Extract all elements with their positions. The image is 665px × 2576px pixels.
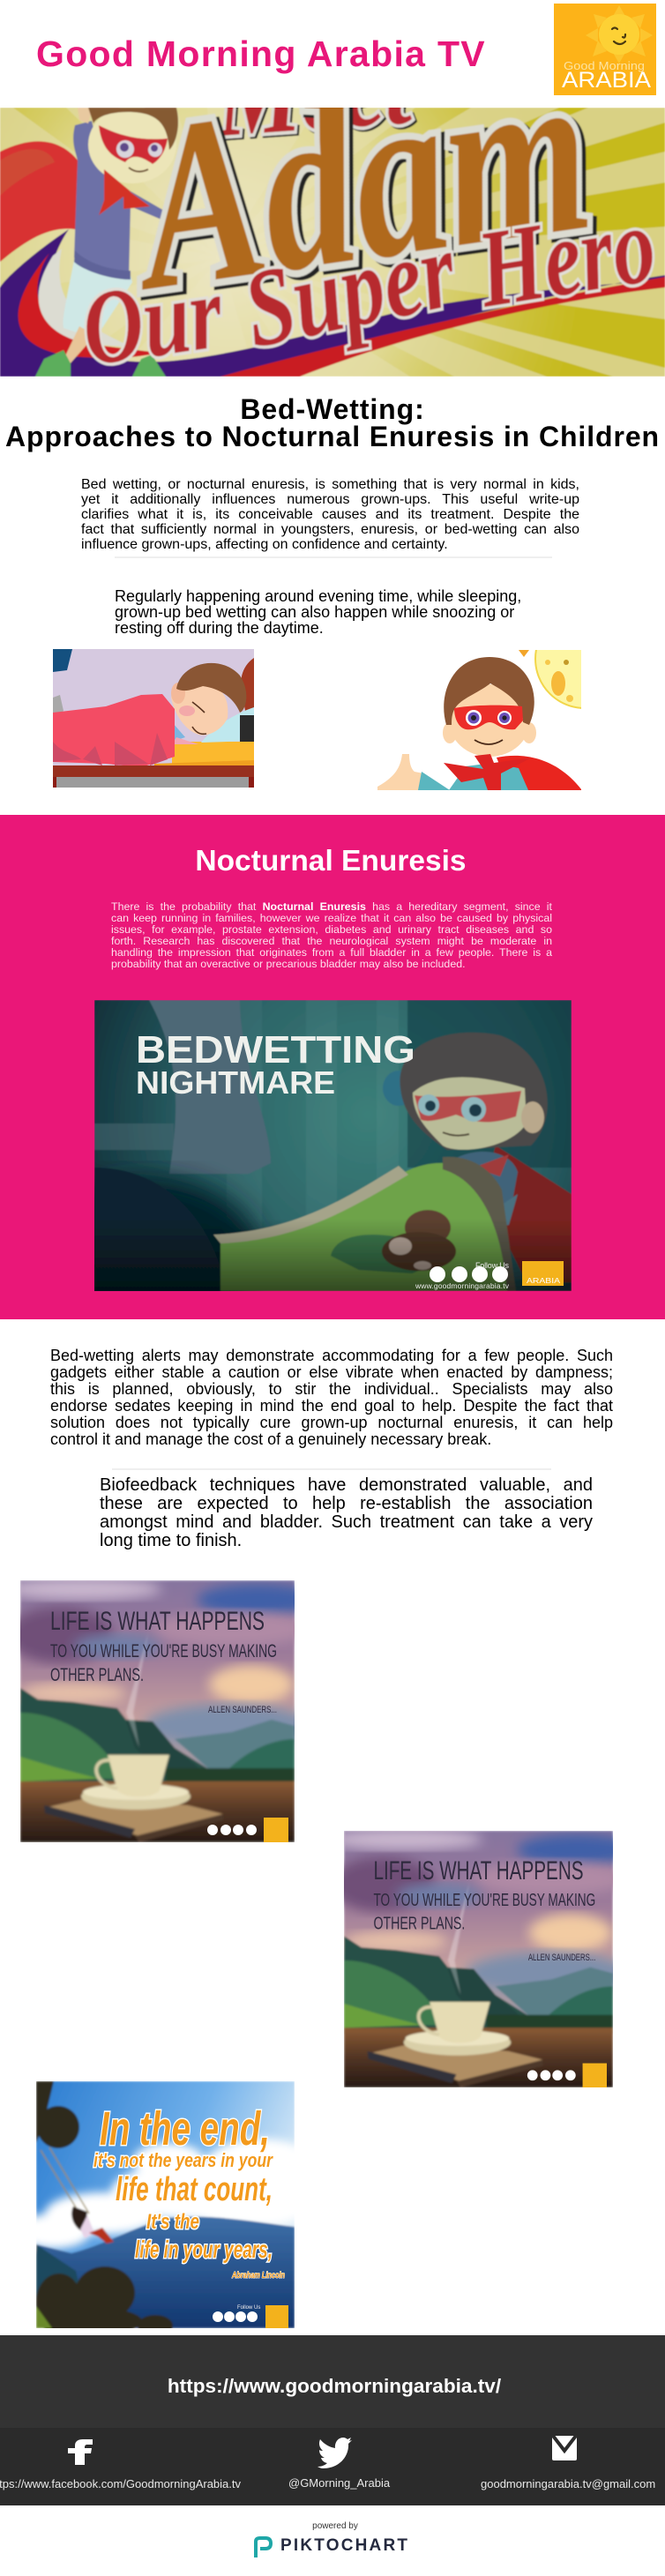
image: coffee quote 2 <box>344 1831 613 2087</box>
image social strip: ARABIA <box>527 1277 561 1285</box>
panel paragraph: forth. Research has discovered that the neurological system might be moderate in <box>111 935 552 947</box>
image title <box>136 1028 415 1101</box>
quote text: OTHER PLANS. <box>50 1665 144 1685</box>
social strip <box>527 2064 607 2087</box>
banner sunburst background <box>0 108 665 377</box>
image: swing quote <box>36 2081 295 2328</box>
panel paragraph: probability that an overactive or precarious bladder may also be included. <box>111 958 466 970</box>
banner: Meet Adam Our Super Hero <box>0 108 665 377</box>
footer: website band <box>0 2335 665 2428</box>
social strip <box>207 1818 288 1842</box>
mountains <box>36 2217 295 2328</box>
icon: piktochart mark <box>254 2536 273 2557</box>
image title: NIGHTMARE <box>136 1064 335 1101</box>
second paragraph: resting off during the daytime. <box>115 619 324 637</box>
paragraph: bed-wetting alerts <box>50 1347 613 1448</box>
quote text: It's the <box>146 2210 199 2234</box>
panel paragraph: issues, for example, prostate extension, diabetes and urinary tract diseases and so <box>111 923 552 936</box>
panel: Nocturnal Enuresis <box>0 815 665 1319</box>
intro paragraph: Bed wetting, or nocturnal enuresis, is something that is very normal in kids, <box>81 477 579 492</box>
paragraph: bed-wetting alerts: control it and manage the cost of a genuinely necessary break. <box>50 1430 491 1448</box>
banner lettering: Our Super Hero <box>75 183 663 388</box>
logo: Good Morning Arabia: ARABIA <box>562 68 651 93</box>
intro paragraph <box>81 477 579 552</box>
banner boy cape <box>0 141 84 262</box>
illustration: Bedwetting Nightmare <box>94 1000 572 1291</box>
intro paragraph: fact that sufficiently normal in youngsters, enuresis, or bed-wetting can also <box>81 522 579 537</box>
paragraph: biofeedback <box>100 1475 593 1550</box>
image social strip: www.goodmorningarabia.tv <box>415 1281 510 1290</box>
logo: Good Morning Arabia <box>554 4 656 95</box>
website url: https://www.goodmorningarabia.tv/ <box>168 2375 501 2397</box>
image: coffee quote 1 <box>20 1580 295 1842</box>
boy body <box>443 1152 518 1225</box>
bear <box>382 1210 456 1271</box>
blanket <box>220 1163 507 1291</box>
icon: twitter <box>318 2438 352 2468</box>
quote text: OTHER PLANS. <box>373 1914 465 1934</box>
paragraph: bed-wetting alerts: gadgets either stable a caution or else vibrate when enacted by dampness; <box>50 1363 613 1381</box>
twitter handle: @GMorning_Arabia <box>288 2476 390 2490</box>
logo: Good Morning Arabia: Good Morning <box>564 59 645 72</box>
panel heading: Nocturnal Enuresis <box>195 845 467 877</box>
second paragraph: grown-up bed wetting can also happen while snoozing or <box>115 603 514 621</box>
paragraph: bed-wetting alerts: endorse sedates keeping in mind the end goal to help. Despite the fact that <box>50 1397 613 1415</box>
main heading <box>5 393 660 452</box>
banner swoosh ribbon <box>0 229 665 377</box>
panel paragraph <box>111 900 552 970</box>
paragraph: biofeedback: amongst mind and bladder. Such treatment can take a very <box>100 1512 593 1532</box>
icon: facebook <box>68 2439 93 2465</box>
boy head <box>383 1033 548 1150</box>
second paragraph <box>115 587 521 637</box>
quote text <box>373 1856 595 1963</box>
second paragraph: Regularly happening around evening time, while sleeping, <box>115 587 521 605</box>
panel paragraph: can keep running in families, however we realize that it can also be caused by physical <box>111 912 552 924</box>
intro paragraph: clarifies what it is, its conceivable causes and its treatment. Despite the <box>81 507 579 522</box>
intro paragraph: yet it additionally influences numerous grown-ups. This useful write-up <box>81 492 579 507</box>
quote text <box>50 1607 277 1715</box>
banner lettering: Our Super Hero: Super <box>234 208 467 371</box>
intro paragraph: influence grown-ups, affecting on confidence and certainty. <box>81 537 448 552</box>
paragraph: biofeedback: these are expected to help re-establish the association <box>100 1494 593 1513</box>
clouds <box>17 2139 327 2249</box>
cup and saucer <box>368 2002 542 2087</box>
main heading: Approaches to Nocturnal Enuresis in Children <box>5 421 660 452</box>
image social strip: Follow Us <box>475 1261 510 1270</box>
main heading: Bed-Wetting: <box>240 393 425 425</box>
image social strip <box>415 1261 564 1290</box>
trees <box>36 2081 173 2336</box>
paragraph: bed-wetting alerts: this is planned, obviously, to stir the individual.. Specialists may also <box>50 1380 613 1398</box>
piktochart wordmark: PIKTOCHART <box>280 2536 409 2555</box>
panel paragraph: handling the impression that originates from a full bladder in a few people. There is a <box>111 946 552 959</box>
boy cape <box>482 1146 572 1282</box>
paragraph: bed-wetting alerts: solution does not typically cure grown-up nocturnal enuresis, it can help <box>50 1414 613 1431</box>
swing <box>41 2147 89 2214</box>
email address: goodmorningarabia.tv@gmail.com <box>481 2477 655 2490</box>
footer: social band <box>0 2428 665 2505</box>
quote text <box>93 2102 285 2281</box>
image title: BEDWETTING <box>136 1028 415 1071</box>
banner boy figure <box>35 106 183 377</box>
illustration: boy sleeping in bed <box>53 649 254 788</box>
cup and saucer <box>44 1755 223 1842</box>
header title: Good Morning Arabia TV <box>36 34 486 74</box>
powered by label: powered by <box>312 2521 358 2531</box>
illustration: smiling superhero boy <box>377 650 581 790</box>
headboard <box>94 1168 227 1291</box>
curtain <box>149 1000 271 1174</box>
panel paragraph: There is the probability that Nocturnal Enuresis has a hereditary segment, since it <box>111 900 552 913</box>
paragraph: biofeedback: long time to finish. <box>100 1531 242 1550</box>
vignette shadow <box>33 1176 262 1335</box>
paragraph: biofeedback: Biofeedback techniques have demonstrated valuable, and <box>100 1475 593 1495</box>
paragraph: bed-wetting alerts: Bed-wetting alerts may demonstrate accommodating for a few people. Such <box>50 1347 613 1364</box>
social strip: Follow Us <box>237 2305 260 2311</box>
social strip <box>213 2305 288 2328</box>
icon: mail <box>552 2436 577 2460</box>
powered by Piktochart <box>254 2521 409 2557</box>
